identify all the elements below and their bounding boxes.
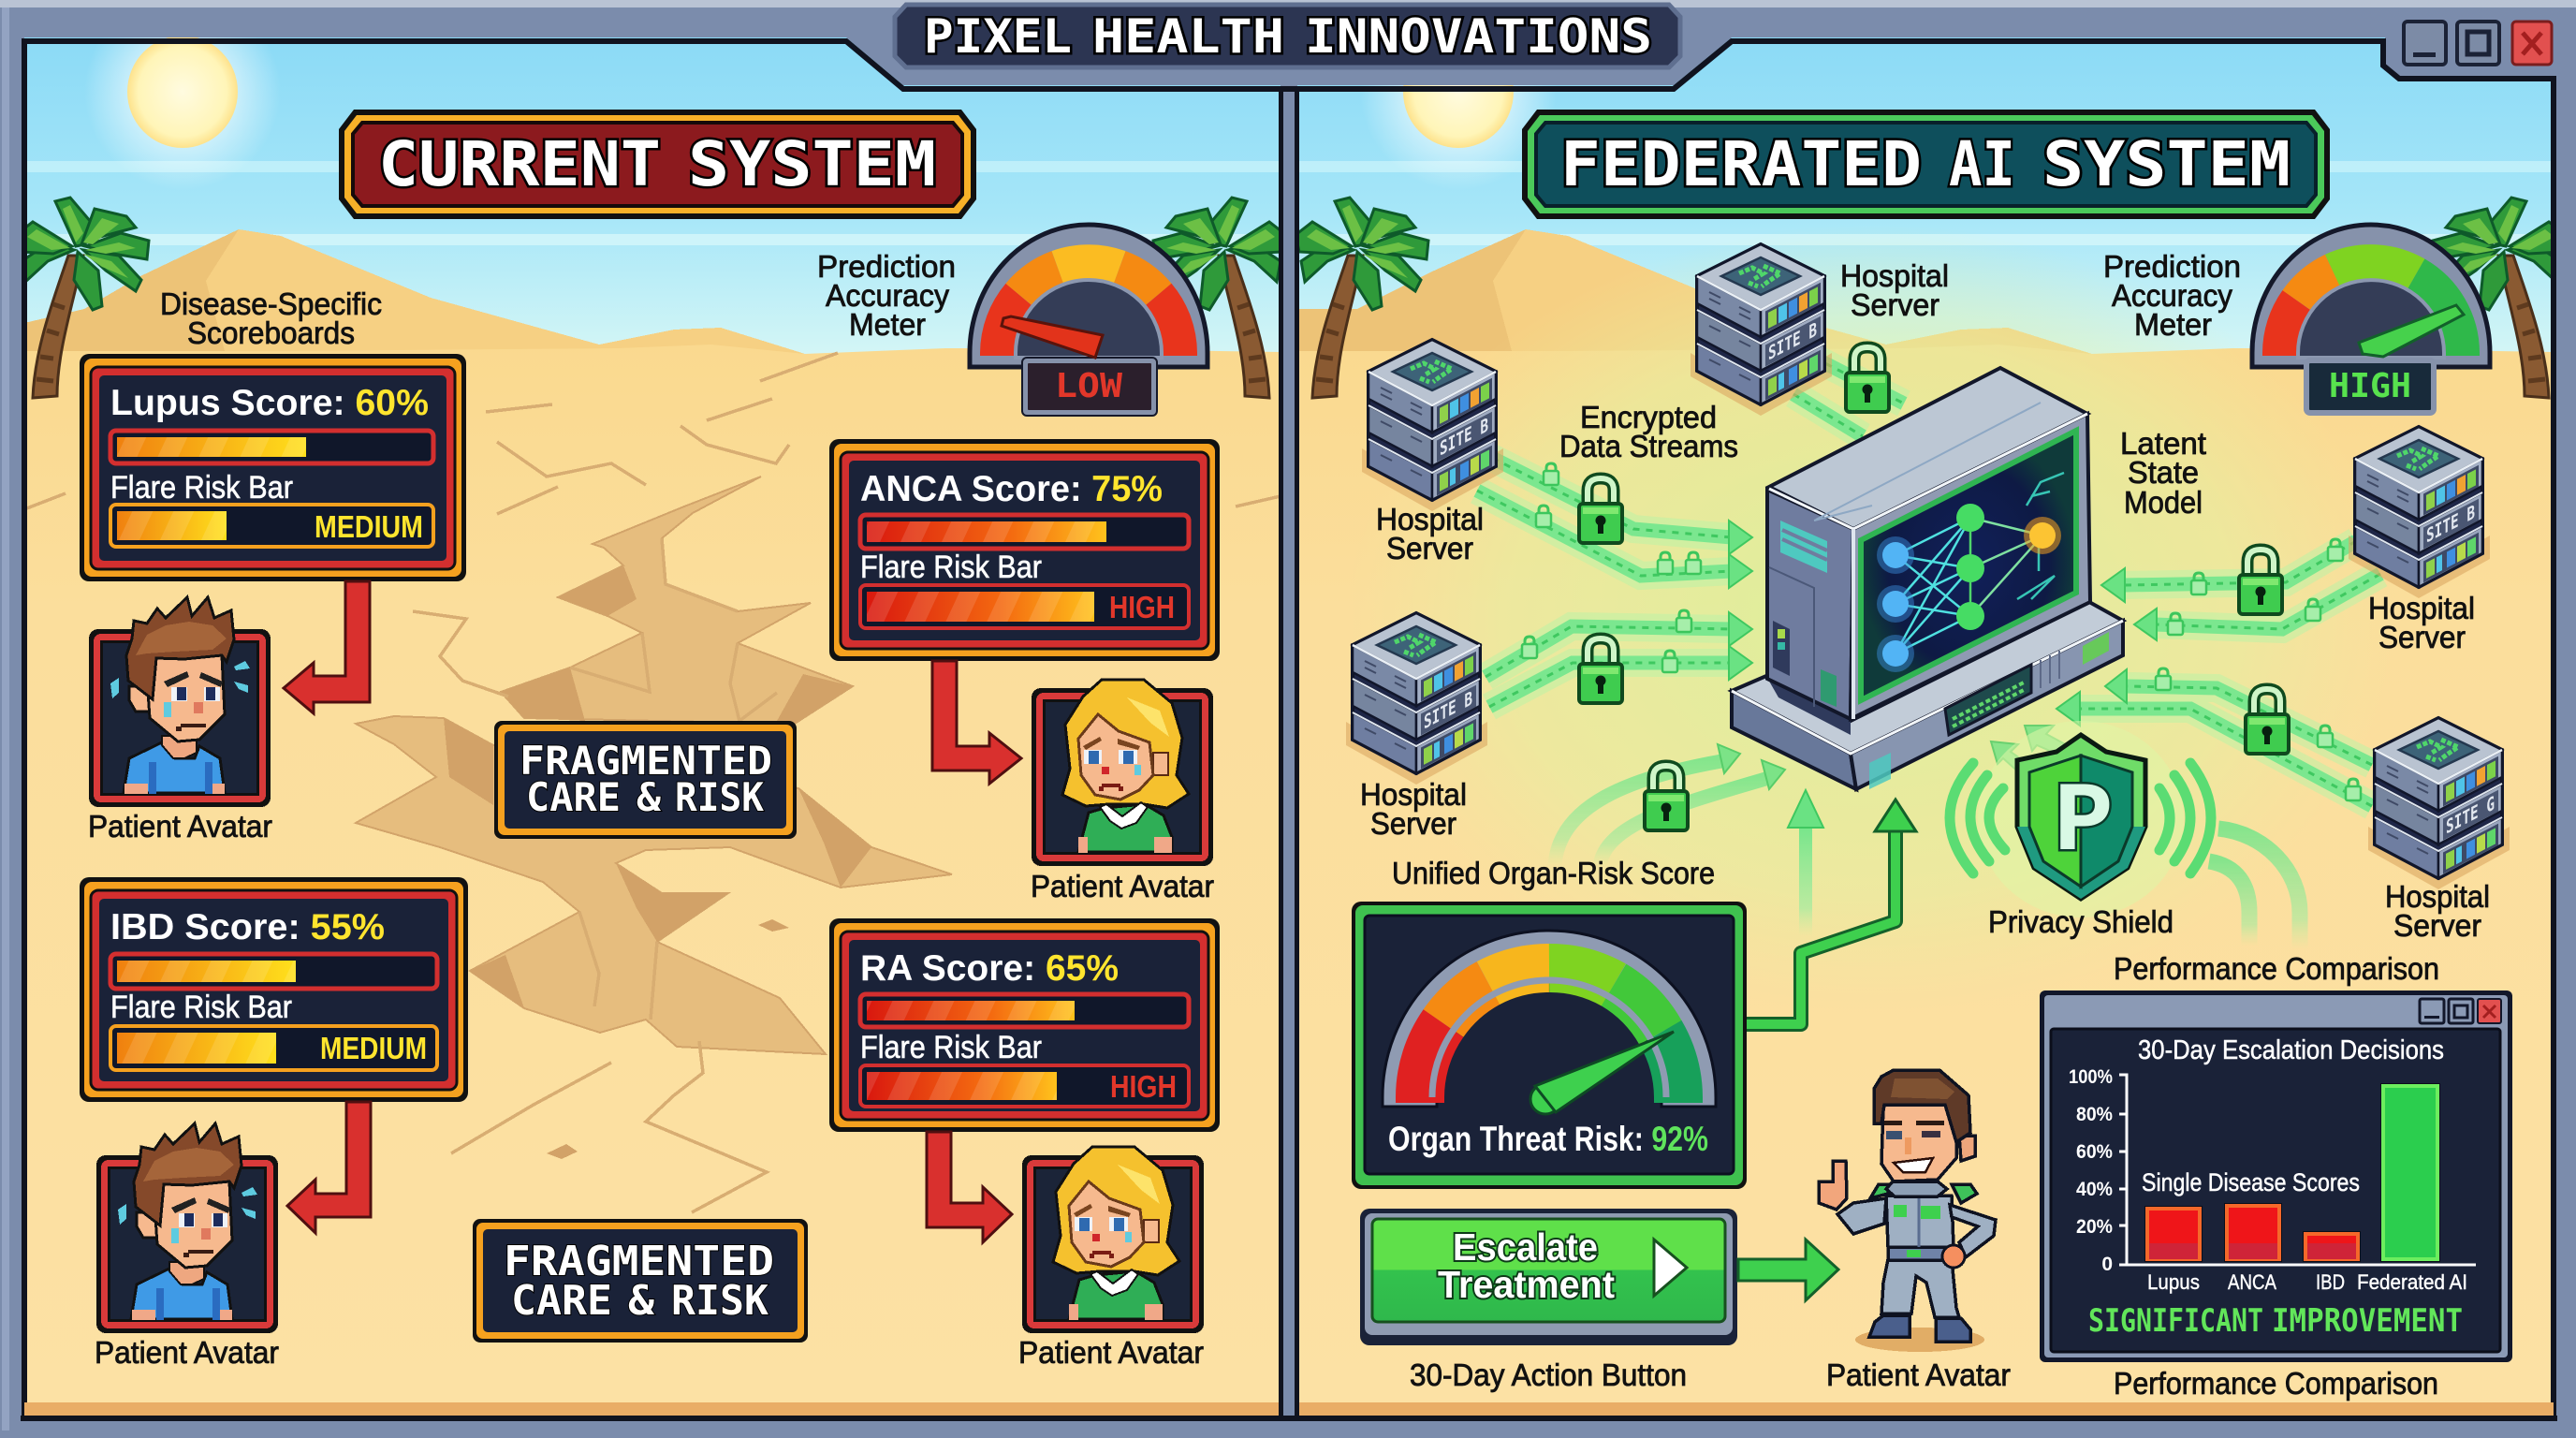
improvement banner: SIGNIFICANT — [2088, 1302, 2263, 1340]
streams: encrypted data from server right upper — [2101, 539, 2380, 640]
label: prediction accuracy meter left: Prediction — [817, 249, 956, 284]
arrow: ra card to avatar — [927, 1132, 1012, 1242]
ra flare label: Flare Risk Bar — [860, 1030, 1042, 1065]
label: encrypted data streams: Encrypted — [1580, 400, 1717, 434]
icon: lock top — [1846, 347, 1889, 412]
server: left upper — [1362, 340, 1503, 511]
label: patient avatar top-left: Patient Avatar — [88, 809, 272, 844]
label: 30-day action button: 30-Day Action Button — [1410, 1357, 1687, 1392]
label: encrypted data streams: Data Streams — [1559, 429, 1738, 463]
lupus flare label: Flare Risk Bar — [110, 470, 293, 506]
avatar: patient top-left — [89, 597, 271, 807]
label: prediction accuracy meter right: Accuracy — [2112, 278, 2232, 313]
bar chart: Federated AI — [2357, 1270, 2467, 1294]
lupus score bar — [110, 431, 433, 463]
server: right upper — [2349, 427, 2490, 598]
bar chart: Lupus — [2147, 1270, 2200, 1294]
callout: fragmented care lower — [473, 1219, 808, 1343]
ground cracks — [24, 353, 1281, 1212]
label: latent state model: State — [2128, 455, 2199, 490]
anca heading: ANCA Score: 75% — [860, 469, 1163, 509]
lupus flare bar — [110, 505, 433, 547]
server: right lower — [2368, 718, 2510, 889]
ra flare bar: HIGH — [1110, 1069, 1177, 1104]
title plaque: HEALTH — [1092, 9, 1284, 64]
gauge: low accuracy — [970, 225, 1208, 416]
gauge: high accuracy: HIGH — [2329, 367, 2411, 405]
label: hospital server left upper: Server — [1386, 531, 1473, 565]
bar chart: Single Disease Scores — [2142, 1168, 2360, 1196]
label: latent state model — [2120, 426, 2206, 520]
icon: lock left upper — [1579, 478, 1622, 543]
title plaque — [895, 5, 1680, 67]
bar chart — [2069, 1066, 2476, 1294]
lupus flare bar: MEDIUM — [315, 509, 423, 544]
heading: current system — [339, 110, 976, 219]
ra heading: RA Score: 65% — [860, 948, 1119, 989]
chart title: 30-Day Escalation Decisions — [2138, 1035, 2444, 1065]
panel: performance comparison window — [2040, 990, 2512, 1362]
callout: fragmented care lower: CARE — [511, 1277, 612, 1325]
avatar: patient bottom-right — [1022, 1147, 1204, 1333]
label: disease-specific scoreboards: Scoreboards — [187, 315, 355, 350]
label: hospital server top — [1840, 258, 1949, 322]
callout: fragmented care lower: & — [628, 1277, 655, 1325]
backdrop: left desert scene — [16, 0, 1286, 1416]
improvement banner: IMPROVEMENT — [2272, 1302, 2463, 1340]
arrow: button to avatar — [1738, 1240, 1838, 1300]
server: top: SITE B — [1768, 318, 1817, 366]
label: encrypted data streams — [1559, 400, 1738, 463]
server: right upper: SITE B — [2426, 501, 2475, 549]
organ risk dial — [1383, 931, 1716, 1114]
label: prediction accuracy meter left: Accuracy — [826, 278, 949, 313]
title plaque: PIXEL — [924, 9, 1072, 64]
callout: fragmented care upper — [494, 721, 797, 839]
backdrop: right desert scene — [1295, 0, 2566, 1416]
avatar: healthy patient — [1819, 1070, 1996, 1352]
window buttons — [2420, 999, 2501, 1023]
stream: thin upward arrow — [1788, 790, 1823, 936]
ibd flare bar: MEDIUM — [320, 1031, 427, 1065]
bar chart: IBD — [2316, 1270, 2345, 1294]
bar chart: 60% — [2076, 1141, 2113, 1163]
ra flare bar — [860, 1065, 1189, 1107]
ibd score bar — [110, 954, 437, 989]
anca score bar — [860, 515, 1189, 549]
label: disease-specific scoreboards: Disease-Specific — [160, 286, 382, 321]
server: left upper: SITE B — [1440, 414, 1488, 462]
label: prediction accuracy meter right: Meter — [2134, 307, 2212, 342]
callout: fragmented care lower: RISK — [671, 1277, 768, 1325]
neural network graphic — [1877, 473, 2064, 672]
label: hospital server left upper: Hospital — [1376, 502, 1484, 536]
streams: encrypted data from server left lower — [1486, 610, 1752, 707]
label: privacy shield: Privacy Shield — [1988, 904, 2174, 939]
label: hospital server left lower: Server — [1370, 806, 1456, 841]
bar chart: 100% — [2069, 1066, 2113, 1088]
icon: lock right upper — [2239, 550, 2282, 614]
bar chart: 0 — [2101, 1254, 2113, 1275]
shield arrows — [1991, 726, 2071, 775]
server: left lower — [1346, 613, 1487, 785]
card: lupus score — [80, 354, 466, 581]
avatar: patient top-right — [1032, 680, 1213, 866]
ibd heading: IBD Score: 55% — [110, 907, 385, 947]
bar chart: 40% — [2076, 1179, 2113, 1200]
heading: current system: CURRENT — [378, 128, 661, 200]
panel: unified organ-risk gauge — [1352, 902, 1747, 1189]
label: hospital server right upper — [2368, 591, 2475, 654]
label: unified organ-risk score: Unified Organ-Risk Score — [1392, 856, 1715, 890]
label: performance comparison top: Performance Comparison — [2114, 951, 2439, 986]
icon: lock bottom — [1645, 766, 1688, 830]
label: hospital server right upper: Server — [2378, 620, 2466, 654]
label: hospital server right lower: Server — [2393, 908, 2481, 943]
bar chart: 80% — [2076, 1104, 2113, 1125]
arrow: gauge panel to computer — [1747, 800, 1916, 1024]
computer: latent state model — [1732, 368, 2123, 789]
button: escalate treatment: Treatment — [1438, 1263, 1615, 1306]
arrow: anca card to avatar — [932, 661, 1021, 784]
label: prediction accuracy meter left: Meter — [849, 307, 926, 342]
heading: current system: SYSTEM — [688, 128, 936, 200]
streams: encrypted data from server left upper — [1477, 452, 1752, 588]
heading: federated AI system: FEDERATED — [1560, 128, 1922, 200]
gauge: low accuracy: LOW — [1055, 367, 1122, 405]
callout: fragmented care upper: & — [637, 774, 662, 820]
label: performance comparison bottom: Performance Comparison — [2114, 1366, 2438, 1401]
card: ibd score — [80, 877, 468, 1102]
organ risk value: Organ Threat Risk: 92% — [1388, 1120, 1708, 1158]
button: escalate treatment: Escalate — [1453, 1225, 1598, 1269]
callout: fragmented care upper: RISK — [675, 774, 765, 820]
window control buttons — [2404, 22, 2552, 65]
arrow: lupus card to avatar — [284, 581, 370, 713]
icon: lock right lower — [2246, 689, 2289, 754]
anca flare label: Flare Risk Bar — [860, 550, 1042, 585]
ibd flare label: Flare Risk Bar — [110, 990, 292, 1025]
heading: federated AI system: AI — [1949, 128, 2015, 200]
label: hospital server right lower: Hospital — [2385, 879, 2490, 914]
gauge: high accuracy — [2252, 225, 2490, 413]
label: hospital server right upper: Hospital — [2368, 591, 2475, 625]
heading: federated AI system — [1522, 110, 2330, 219]
ra score bar — [860, 994, 1189, 1027]
label: patient avatar top-right: Patient Avatar — [1031, 869, 1214, 903]
label: hospital server top: Hospital — [1840, 258, 1949, 293]
streams: faded into shield side — [2209, 829, 2300, 949]
label: patient avatar bottom-left: Patient Avatar — [95, 1335, 279, 1370]
callout: fragmented care lower: FRAGMENTED — [504, 1238, 774, 1285]
label: disease-specific scoreboards — [160, 286, 382, 350]
callout: fragmented care upper: FRAGMENTED — [520, 738, 772, 784]
arrow: ibd card to avatar — [287, 1102, 371, 1233]
anca flare bar: HIGH — [1109, 590, 1175, 624]
label: latent state model: Latent — [2120, 426, 2206, 461]
icon: privacy shield with waves — [1950, 721, 2211, 917]
heading: federated AI system: SYSTEM — [2042, 128, 2291, 200]
card: ra score — [829, 918, 1220, 1132]
label: hospital server left lower — [1360, 777, 1467, 841]
server: left lower: SITE B — [1424, 687, 1472, 735]
callout: fragmented care upper: CARE — [526, 774, 621, 820]
icon: privacy shield with waves: P — [2054, 767, 2114, 879]
bar chart: ANCA — [2228, 1270, 2276, 1294]
button: escalate treatment — [1360, 1209, 1737, 1345]
lupus heading: Lupus Score: 60% — [110, 383, 429, 423]
label: patient avatar bottom-right: Patient Avatar — [1018, 1335, 1204, 1370]
bar chart: 20% — [2076, 1216, 2113, 1238]
improvement banner — [2088, 1302, 2463, 1340]
server: right lower: SITE G — [2446, 792, 2495, 840]
avatar: patient bottom-left — [96, 1123, 278, 1333]
label: latent state model: Model — [2124, 485, 2203, 520]
label: prediction accuracy meter right: Prediction — [2103, 249, 2241, 284]
anca flare bar — [860, 585, 1189, 628]
streams: encrypted data from server top — [1793, 358, 1904, 436]
card: anca score — [829, 439, 1220, 661]
server: top — [1690, 244, 1832, 416]
label: hospital server left lower: Hospital — [1360, 777, 1467, 812]
label: hospital server top: Server — [1851, 287, 1939, 322]
icon: lock left lower — [1579, 638, 1622, 703]
shield signal waves — [1950, 763, 2211, 873]
label: hospital server left upper — [1376, 502, 1484, 565]
label: prediction accuracy meter right — [2103, 249, 2241, 342]
streams: curved data from below left — [1555, 744, 1785, 866]
label: hospital server right lower — [2385, 879, 2490, 943]
title plaque: INNOVATIONS — [1305, 9, 1652, 64]
streams: encrypted data from server right lower — [2056, 668, 2372, 806]
label: patient avatar right panel: Patient Avatar — [1826, 1357, 2011, 1392]
label: prediction accuracy meter left — [817, 249, 956, 342]
ibd flare bar — [110, 1026, 437, 1070]
